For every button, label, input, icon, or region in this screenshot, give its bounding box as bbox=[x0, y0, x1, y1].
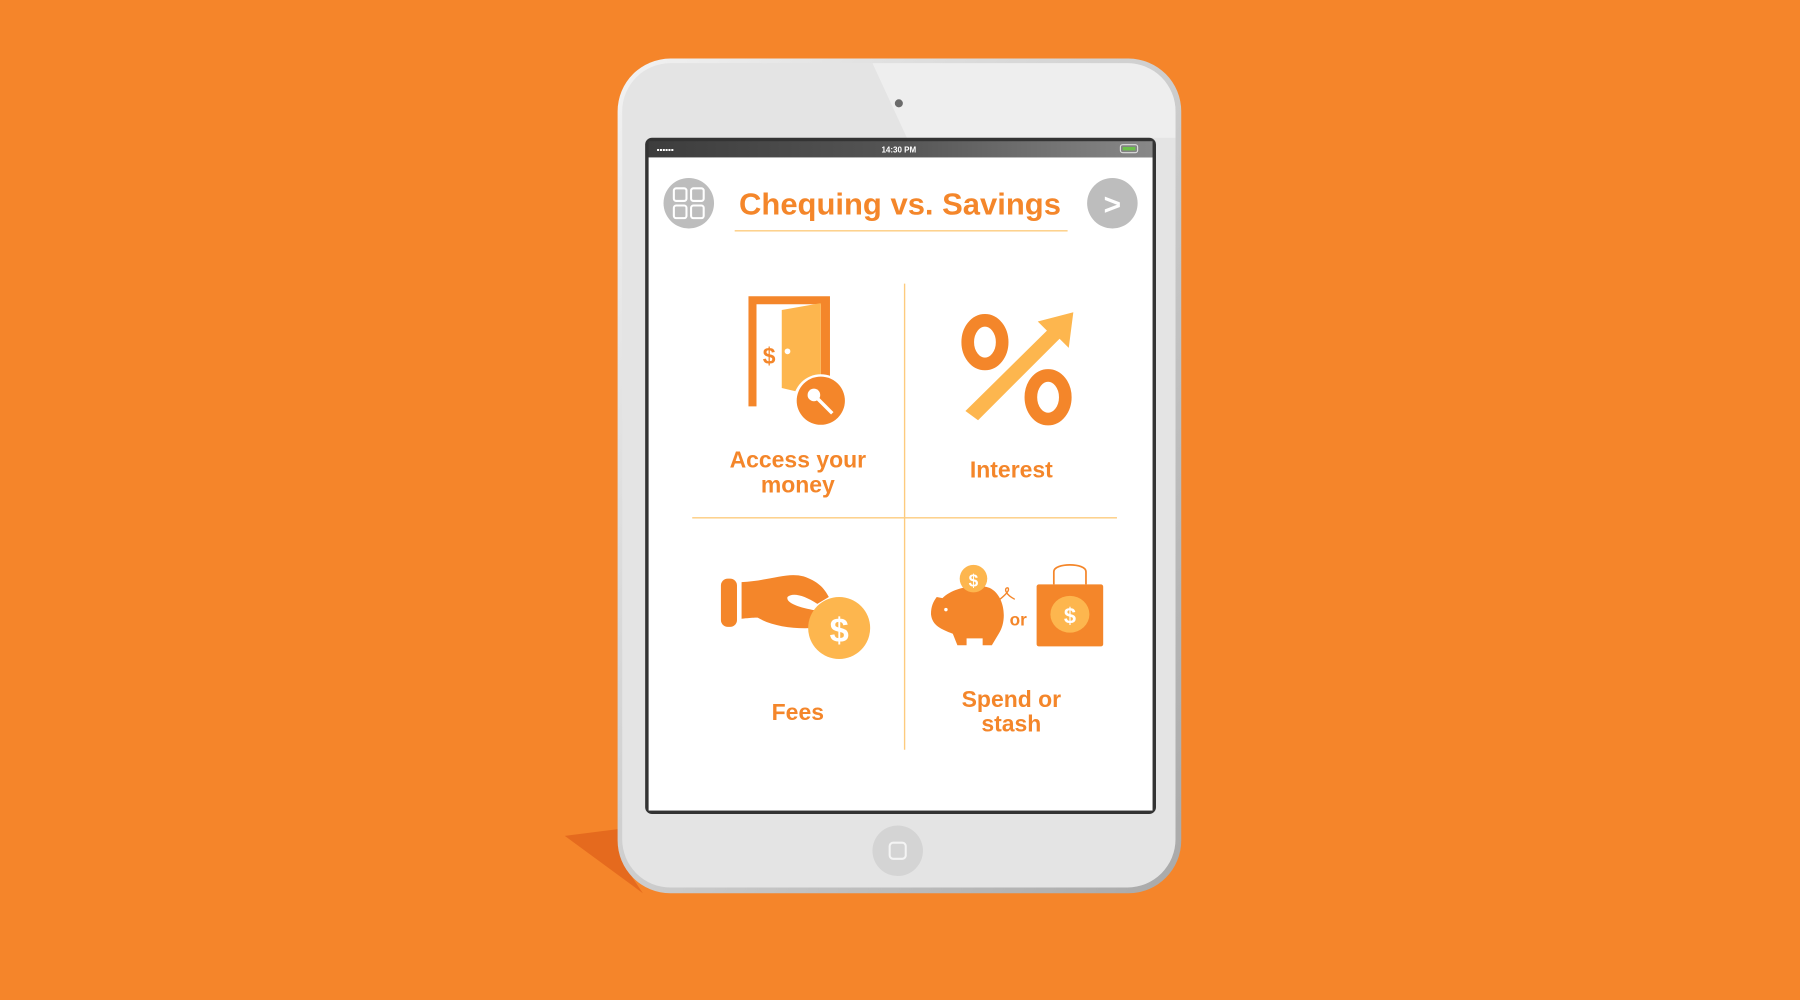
tablet bbox=[618, 59, 1182, 893]
panel: spend or stash: or bbox=[1010, 610, 1027, 630]
icon: piggy bank bbox=[931, 565, 1015, 645]
icon: next arrow: > bbox=[1104, 189, 1121, 222]
panel: interest bbox=[965, 312, 1073, 483]
panel: access your money: Access your bbox=[730, 446, 866, 472]
camera bbox=[895, 99, 903, 107]
panel: fees bbox=[721, 575, 870, 725]
icon: door with key: $ bbox=[763, 343, 776, 369]
panel: access your money: money bbox=[761, 472, 835, 498]
panel: access your money bbox=[730, 296, 866, 498]
icon: shopping bag: $ bbox=[1064, 603, 1076, 628]
icon: hand with coin: $ bbox=[830, 612, 849, 650]
icon: hand with coin bbox=[721, 575, 870, 659]
panel: spend or stash: stash bbox=[981, 710, 1041, 736]
status bar: ▪▪▪▪▪▪ bbox=[657, 146, 674, 155]
panel: spend or stash: Spend or bbox=[962, 686, 1061, 712]
icon: door with key bbox=[748, 296, 848, 429]
panel: interest: Interest bbox=[970, 457, 1053, 483]
icon: shopping bag bbox=[1037, 565, 1103, 646]
screen bbox=[645, 138, 1156, 814]
title: Chequing vs. Savings bbox=[739, 187, 1061, 222]
icon: next arrow bbox=[1087, 178, 1138, 228]
panel: spend or stash bbox=[931, 565, 1103, 736]
status bar bbox=[649, 141, 1153, 157]
tablet shadow bbox=[565, 829, 643, 893]
icon: home button bbox=[872, 825, 923, 876]
panel: fees: Fees bbox=[772, 699, 824, 725]
icon: piggy bank: $ bbox=[969, 571, 979, 591]
icon: percent with arrow bbox=[965, 312, 1073, 420]
status bar: 14:30 PM bbox=[881, 146, 917, 155]
icon: menu grid bbox=[664, 178, 714, 228]
